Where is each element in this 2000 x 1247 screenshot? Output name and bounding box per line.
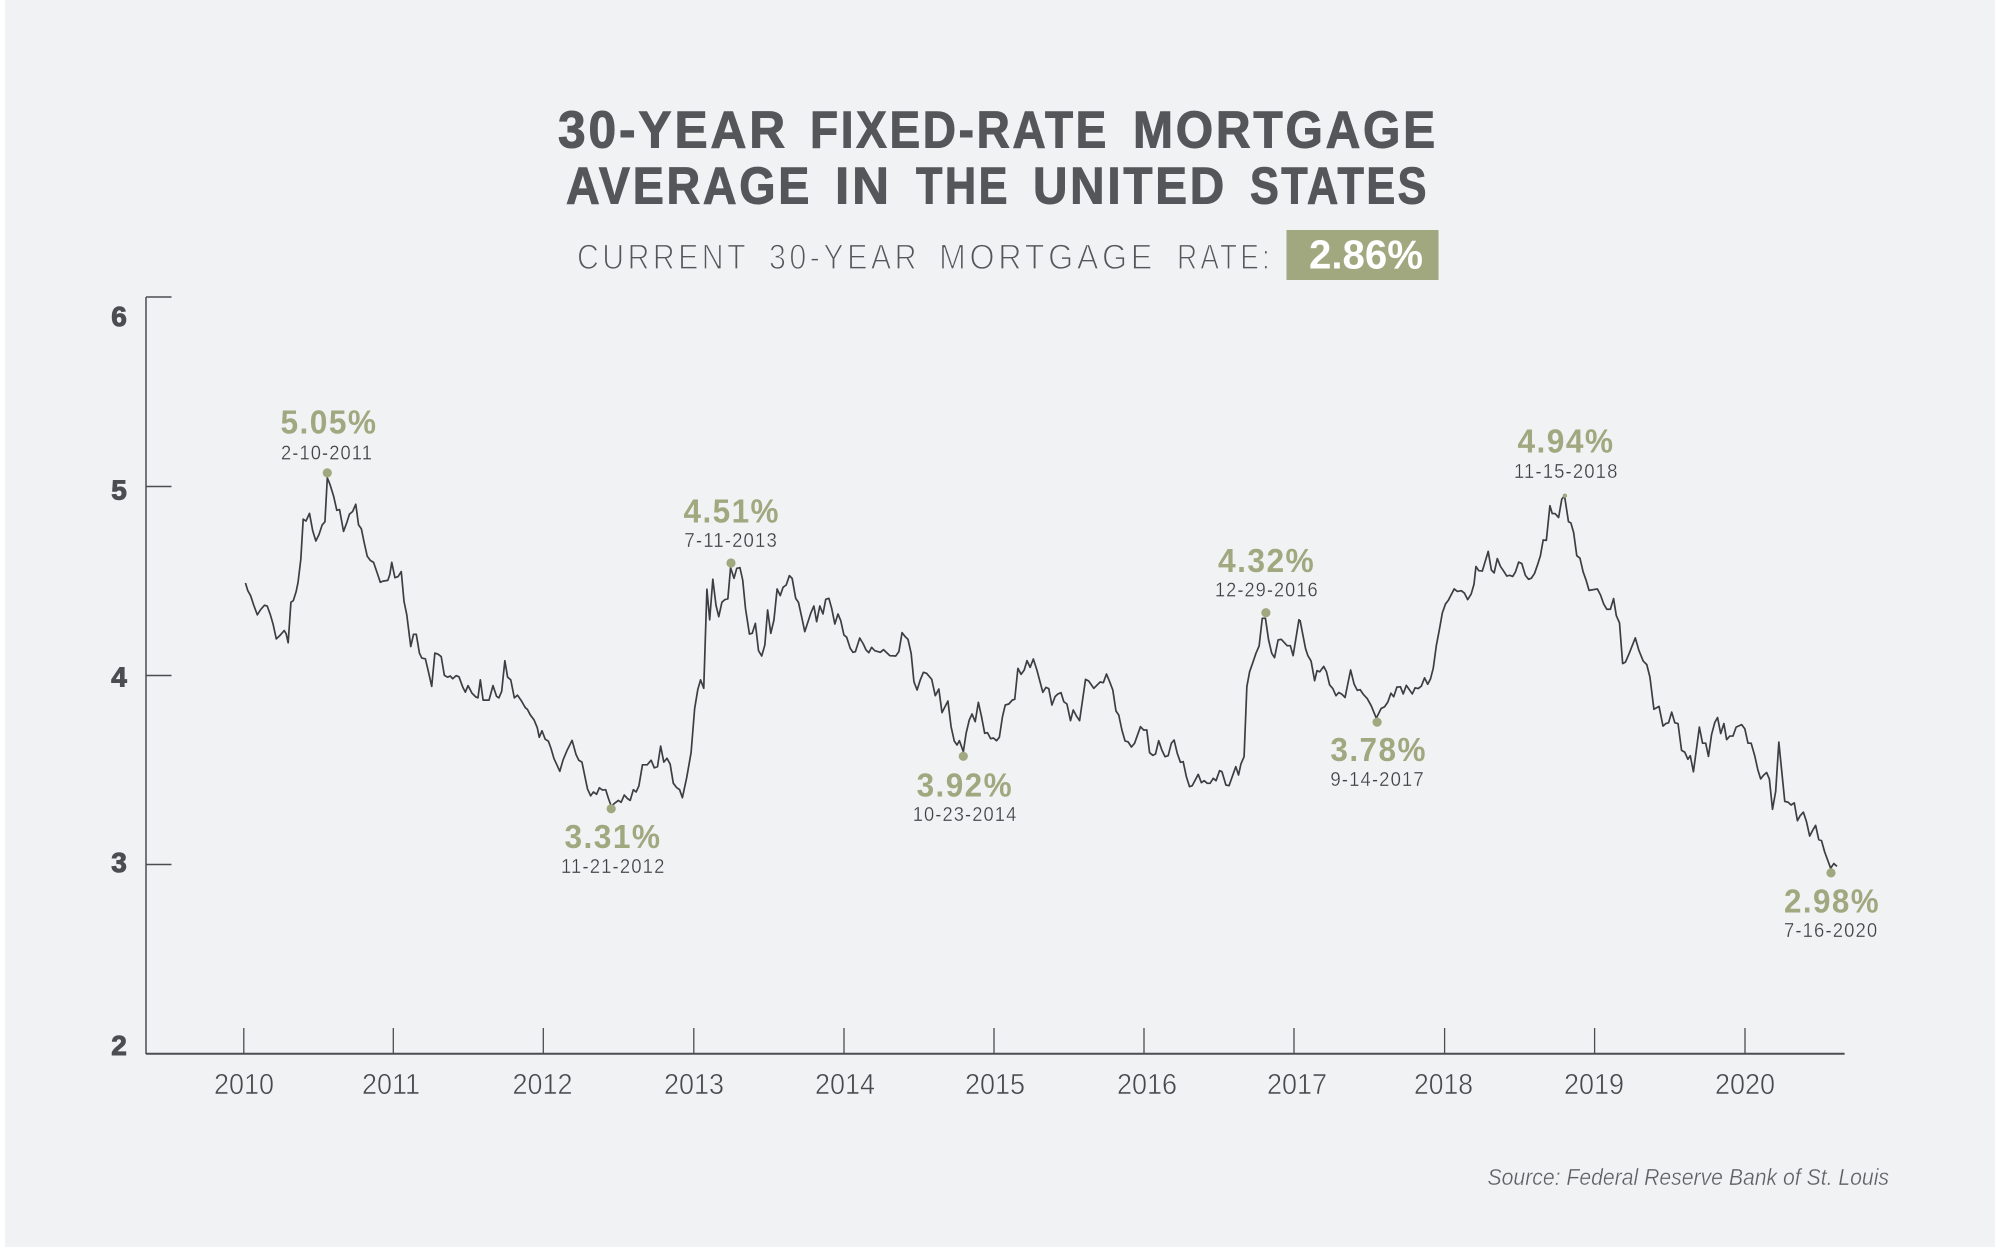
callout: 2.98%: 2.98% — [1784, 883, 1880, 920]
y axis labels: 4 — [111, 662, 127, 692]
title: THE — [916, 158, 1010, 216]
callout: 3.31%: 3.31% — [564, 818, 662, 855]
x axis year labels: 2013 — [664, 1069, 724, 1101]
callout: 3.78%: 9-14-2017 — [1330, 769, 1425, 791]
x axis year labels: 2019 — [1564, 1069, 1624, 1101]
x axis year labels: 2012 — [512, 1069, 572, 1101]
callout: 4.32% — [1215, 542, 1319, 617]
y axis — [146, 297, 172, 1054]
y axis labels: 5 — [111, 474, 127, 506]
y axis labels — [111, 301, 127, 1061]
callout: 3.92%: 10-23-2014 — [913, 804, 1017, 826]
callout: 4.94%: 4.94% — [1518, 423, 1614, 460]
x axis year labels: 2010 — [214, 1069, 274, 1101]
x axis — [146, 1028, 1845, 1054]
line chart: mortgage rate — [245, 478, 1837, 868]
title: FIXED-RATE — [810, 102, 1109, 160]
title: UNITED — [1033, 158, 1227, 216]
subtitle: current rate: CURRENT — [577, 238, 749, 277]
callout: 4.94%: 11-15-2018 — [1514, 461, 1618, 483]
title: IN — [835, 158, 892, 216]
callout: 4.51% — [684, 492, 780, 568]
callout: 2.98%: 7-16-2020 — [1784, 920, 1878, 942]
callout: 3.31% — [561, 804, 666, 878]
source note: Source: Federal Reserve Bank of St. Louis — [1488, 1164, 1889, 1190]
x axis year labels: 2015 — [965, 1069, 1025, 1101]
callout: 4.32%: 12-29-2016 — [1215, 580, 1319, 602]
callout: 5.05%: 2-10-2011 — [281, 443, 373, 465]
y axis labels: 6 — [111, 301, 127, 332]
y axis labels: 2 — [111, 1030, 127, 1061]
callout: 4.94% — [1514, 423, 1618, 498]
callout: 3.31%: 11-21-2012 — [561, 856, 666, 878]
title: MORTGAGE — [1133, 102, 1438, 160]
title: 30-YEAR — [558, 102, 788, 160]
y axis labels: 3 — [111, 847, 127, 878]
subtitle: current rate: 30-YEAR — [769, 238, 920, 277]
x axis year labels: 2020 — [1715, 1069, 1775, 1101]
callout: 3.92% — [913, 752, 1017, 826]
callout: 5.05% — [280, 404, 378, 478]
x axis year labels — [214, 1069, 1775, 1101]
current rate badge: 2.86% — [1309, 232, 1423, 278]
x axis year labels: 2017 — [1267, 1069, 1327, 1101]
callout: 4.51%: 4.51% — [684, 492, 780, 529]
subtitle: current rate: RATE: — [1177, 238, 1273, 277]
title: STATES — [1250, 158, 1429, 216]
callout: 3.78%: 3.78% — [1330, 731, 1427, 768]
x axis year labels: 2016 — [1117, 1069, 1177, 1101]
title: AVERAGE — [566, 158, 812, 216]
title — [558, 102, 1438, 216]
callout: 3.92%: 3.92% — [917, 766, 1013, 803]
callout: 5.05%: 5.05% — [280, 404, 378, 441]
callout: 4.51%: 7-11-2013 — [684, 530, 778, 552]
x axis year labels: 2018 — [1414, 1069, 1473, 1101]
x axis year labels: 2011 — [362, 1069, 420, 1101]
x axis year labels: 2014 — [815, 1069, 875, 1101]
callout: 2.98% — [1784, 868, 1880, 942]
callout: 4.32%: 4.32% — [1218, 542, 1315, 579]
callout: 3.78% — [1330, 718, 1427, 791]
subtitle: current rate — [577, 238, 1273, 277]
subtitle: current rate: MORTGAGE — [939, 238, 1156, 277]
